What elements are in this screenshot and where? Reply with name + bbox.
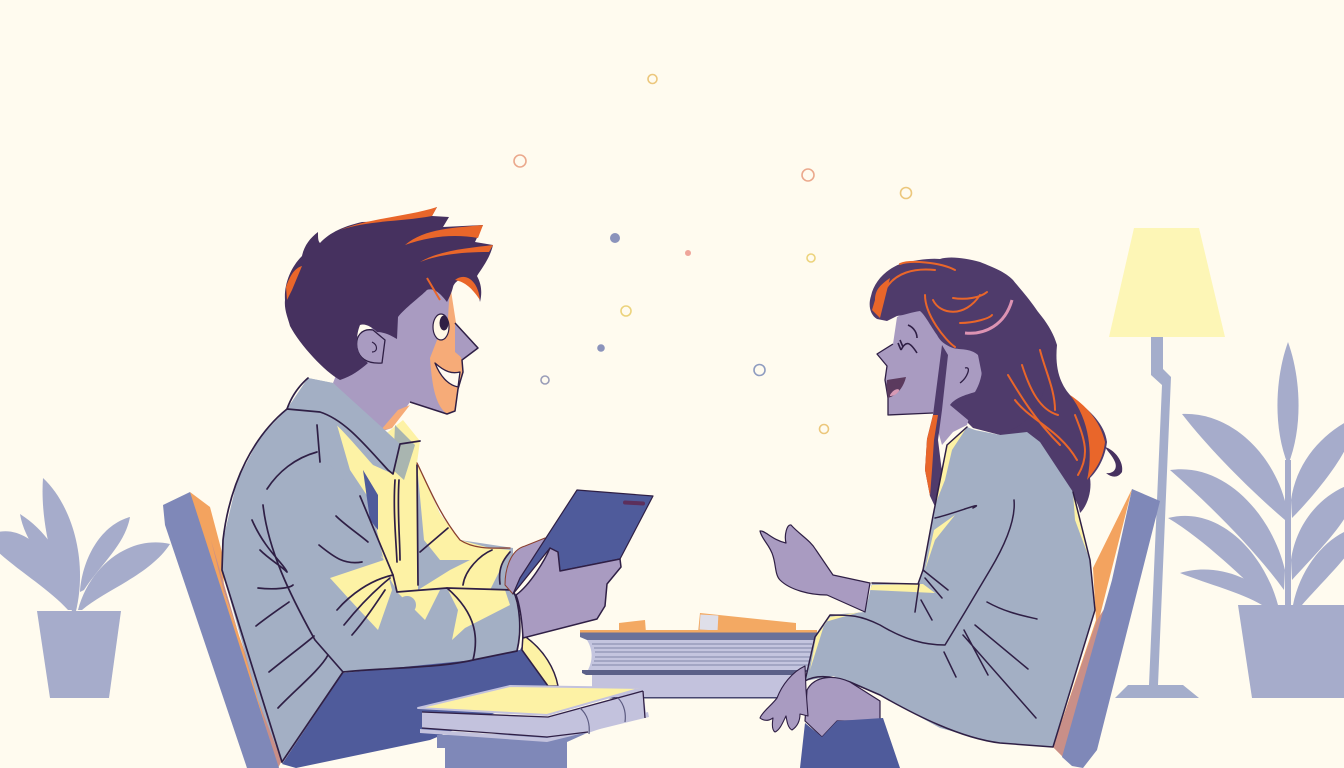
man mouth xyxy=(435,363,460,387)
man front hand xyxy=(516,548,621,638)
woman dress highlights xyxy=(810,427,1088,670)
man trousers xyxy=(282,636,550,768)
pedestal xyxy=(437,733,587,768)
lamp shade xyxy=(1109,228,1225,337)
woman ear xyxy=(950,355,978,390)
man hair orange streaks xyxy=(286,207,493,300)
woman lower hand xyxy=(760,666,808,732)
upper book xyxy=(580,631,817,640)
man back hand xyxy=(505,538,555,594)
man hood xyxy=(287,378,400,474)
man ear xyxy=(357,330,385,363)
woman dress xyxy=(805,427,1095,747)
woman front hair xyxy=(870,258,1052,432)
pot right xyxy=(1238,605,1344,698)
woman arm and hand xyxy=(760,525,870,612)
pot left xyxy=(37,611,121,698)
woman sock xyxy=(800,718,900,768)
man hair xyxy=(285,207,493,380)
woman back hair xyxy=(955,280,1107,513)
woman dress lines xyxy=(805,427,1095,747)
front book and pedestal xyxy=(418,686,649,768)
man eye xyxy=(433,314,449,340)
man shirt yellow xyxy=(337,420,510,598)
man sleeve xyxy=(263,452,520,671)
plant left xyxy=(0,478,170,698)
plant right xyxy=(1168,342,1344,698)
woman hair streaks xyxy=(885,262,1085,475)
woman figure xyxy=(760,258,1122,768)
man jacket body xyxy=(222,378,520,762)
man jacket lines xyxy=(222,378,520,762)
woman's chair xyxy=(1053,489,1160,768)
woman leg xyxy=(805,677,880,737)
man face highlight xyxy=(430,284,463,414)
sticky tabs xyxy=(619,620,646,633)
book pages xyxy=(422,690,646,737)
man's chair xyxy=(163,492,282,768)
stacked books xyxy=(580,613,817,698)
floating dots xyxy=(514,74,912,434)
lower book xyxy=(592,672,800,697)
book cover bottom xyxy=(420,712,649,742)
man neck and face xyxy=(333,284,478,432)
woman front hair lock xyxy=(925,345,948,513)
book top xyxy=(418,686,642,715)
man figure xyxy=(222,207,653,768)
woman eye xyxy=(898,325,917,353)
woman mouth xyxy=(887,377,906,398)
tablet xyxy=(513,490,653,594)
woman face and neck xyxy=(877,305,982,445)
floor lamp xyxy=(1109,228,1225,698)
